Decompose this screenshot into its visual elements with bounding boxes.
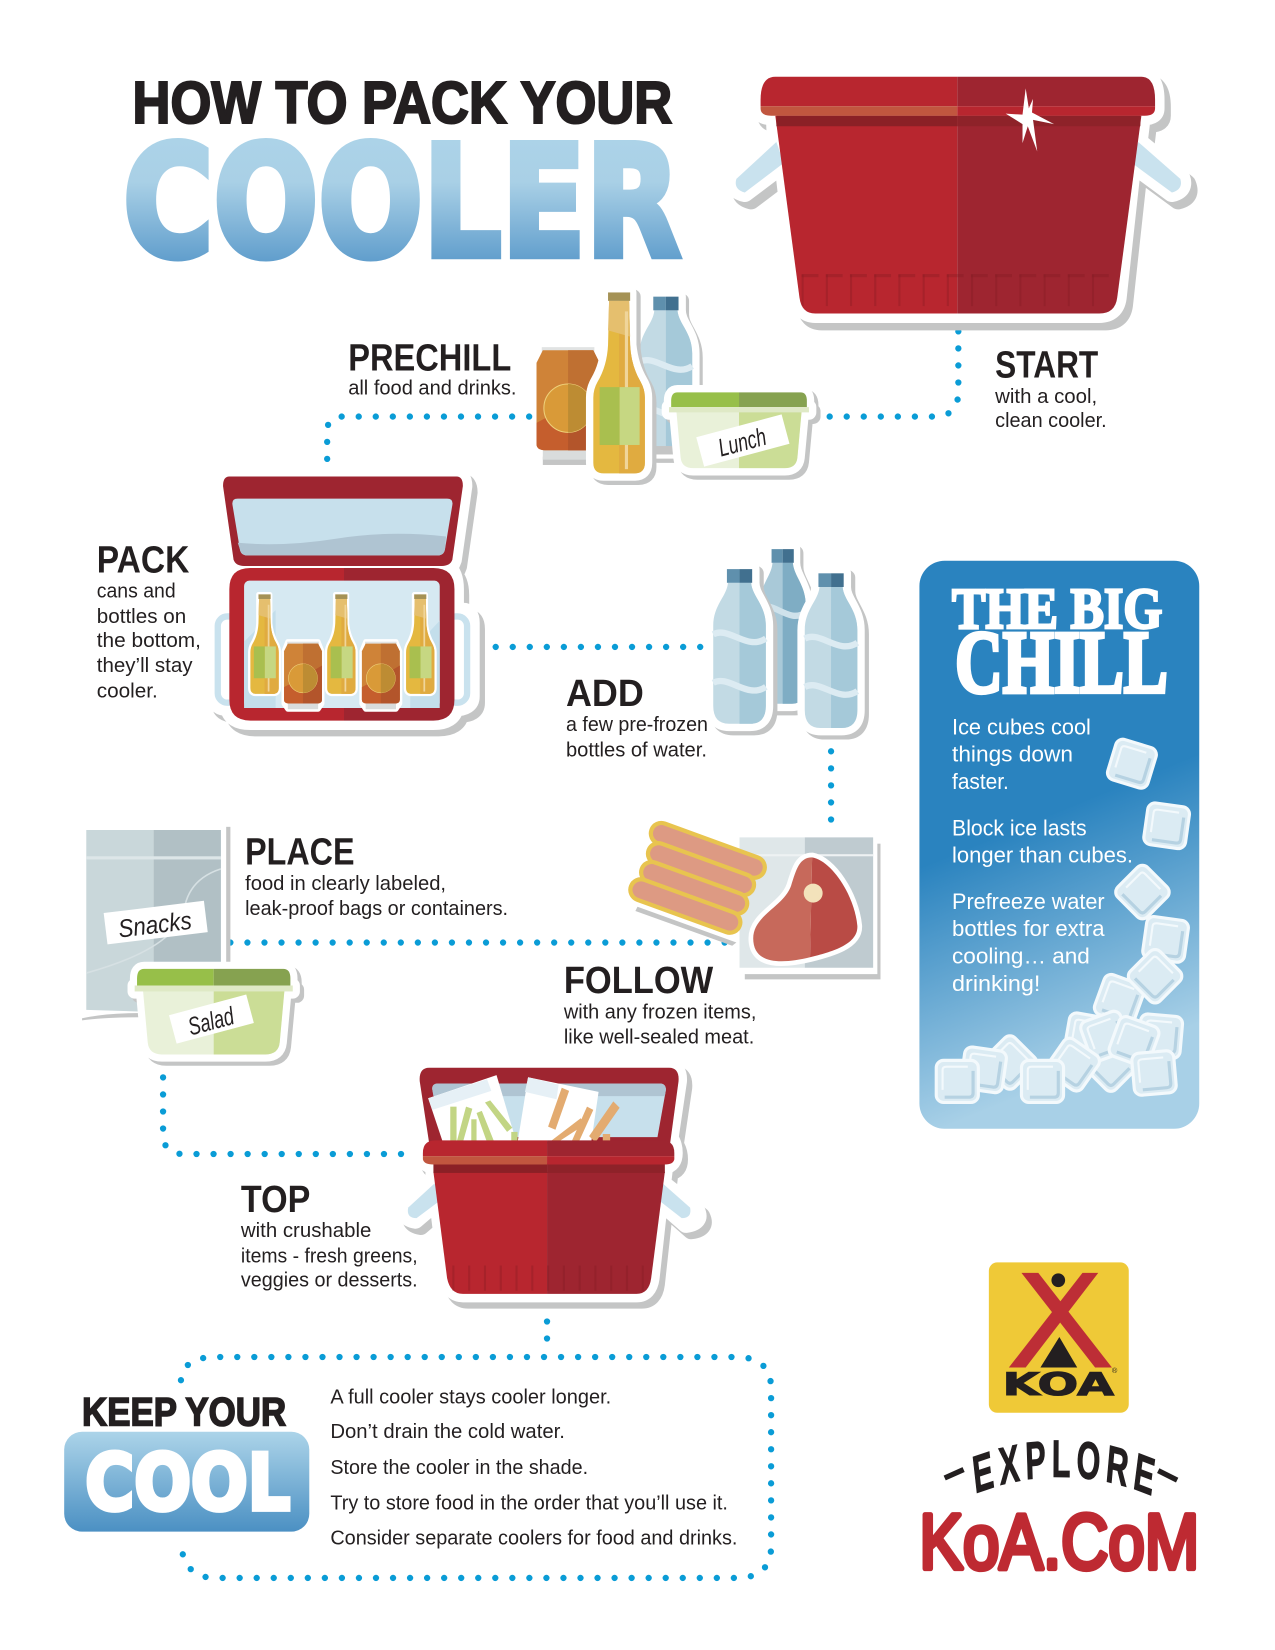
heading: pack step (97, 539, 201, 702)
text block: cooler tips: Don’t drain the cold water. (330, 1421, 565, 1443)
ice cube tips text (952, 714, 1133, 996)
heading: add step: bottles of water. (566, 739, 707, 761)
heading: pack step: the bottom, (97, 630, 201, 652)
icon: prechill drinks and lunch: Lunch (715, 423, 769, 462)
icon: cooler topped with vegetables (405, 1068, 703, 1300)
heading: top step: with crushable (240, 1220, 371, 1242)
heading: add step: ADD (566, 673, 644, 715)
ice cube tips text: Ice cubes cool (952, 714, 1091, 739)
heading: keep your: KEEP YOUR (82, 1390, 286, 1434)
icon: prechill drinks and lunch (537, 292, 813, 478)
badge: cool: COOL (85, 1439, 290, 1529)
heading: add step: a few pre-frozen (566, 714, 708, 736)
heading: pack step: bottles on (97, 606, 186, 628)
heading: follow step: like well-sealed meat. (564, 1027, 754, 1049)
ice cube tips text: things down (952, 742, 1073, 767)
icon: frozen water bottles (713, 549, 862, 732)
heading: pack step: cans and (97, 581, 176, 603)
icon: snacks bag (82, 827, 230, 1020)
heading: follow step (563, 960, 756, 1049)
heading: place step: leak-proof bags or containers. (245, 898, 508, 920)
ice cube tips text: drinking! (952, 971, 1040, 996)
ice cube tips text: Prefreeze water (952, 889, 1105, 914)
icon: ice cubes (936, 737, 1190, 1102)
heading: place step: food in clearly labeled, (245, 873, 446, 895)
text block: cooler tips: Consider separate coolers for food and drinks. (330, 1527, 737, 1549)
ice cube tips text: longer than cubes. (952, 843, 1133, 868)
text: explore (944, 1440, 1178, 1496)
heading: place step: PLACE (245, 832, 355, 874)
heading: the big chill: CHILL (955, 613, 1168, 712)
heading: add step (566, 673, 708, 761)
heading: top step: items - fresh greens, (241, 1245, 418, 1267)
icon: salad container (135, 969, 297, 1059)
icon: salad container: Salad (185, 1002, 238, 1041)
heading: top step (240, 1179, 418, 1292)
icon: snacks bag: Snacks (117, 907, 194, 944)
title: cooler: COOLER (123, 114, 681, 293)
heading: the big chill: THE BIG (952, 576, 1162, 641)
heading: pack step: cooler. (97, 680, 158, 702)
logo: koa: ® (1112, 1366, 1118, 1375)
text block: cooler tips: Store the cooler in the shade. (330, 1457, 588, 1479)
heading: the big chill (952, 576, 1168, 712)
heading: start step: clean cooler. (995, 410, 1107, 432)
heading: start step: with a cool, (994, 386, 1097, 408)
heading: pack step: they’ll stay (97, 655, 193, 677)
ice cube tips text: Block ice lasts (952, 815, 1087, 840)
heading: prechill step: PRECHILL (348, 337, 511, 379)
ice cube tips text: faster. (952, 769, 1009, 794)
dotted connector path (163, 331, 958, 1578)
heading: top step: veggies or desserts. (241, 1270, 418, 1292)
heading: start step: START (995, 345, 1098, 387)
heading: prechill step: all food and drinks. (348, 377, 517, 399)
text block: cooler tips (330, 1386, 737, 1549)
heading: pack step: PACK (97, 539, 189, 581)
heading: follow step: FOLLOW (564, 960, 713, 1002)
logo: koa: KOA (1003, 1367, 1115, 1403)
heading: place step (245, 832, 508, 920)
icon: frozen meat and hot dogs (627, 820, 881, 979)
text block: cooler tips: A full cooler stays cooler longer. (330, 1386, 611, 1408)
ice cube tips text: bottles for extra (952, 916, 1105, 941)
text: explore: EXPLORE (972, 1440, 1156, 1496)
icon: sparkle (1006, 88, 1054, 151)
heading: top step: TOP (241, 1179, 310, 1221)
icon: closed red cooler (735, 77, 1188, 321)
text block: cooler tips: Try to store food in the order that you’ll use it. (330, 1493, 728, 1515)
heading: prechill step (348, 337, 517, 399)
panel: the big chill (919, 561, 1199, 1129)
ice cube tips text: cooling… and (952, 944, 1090, 969)
icon: open cooler packed with drinks (216, 477, 475, 727)
heading: follow step: with any frozen items, (563, 1001, 756, 1023)
text: koa.com: KoA.CoM (919, 1499, 1199, 1585)
logo: koa (989, 1262, 1129, 1413)
heading: start step (994, 345, 1107, 432)
title: how to pack your: HOW TO PACK YOUR (133, 71, 672, 136)
